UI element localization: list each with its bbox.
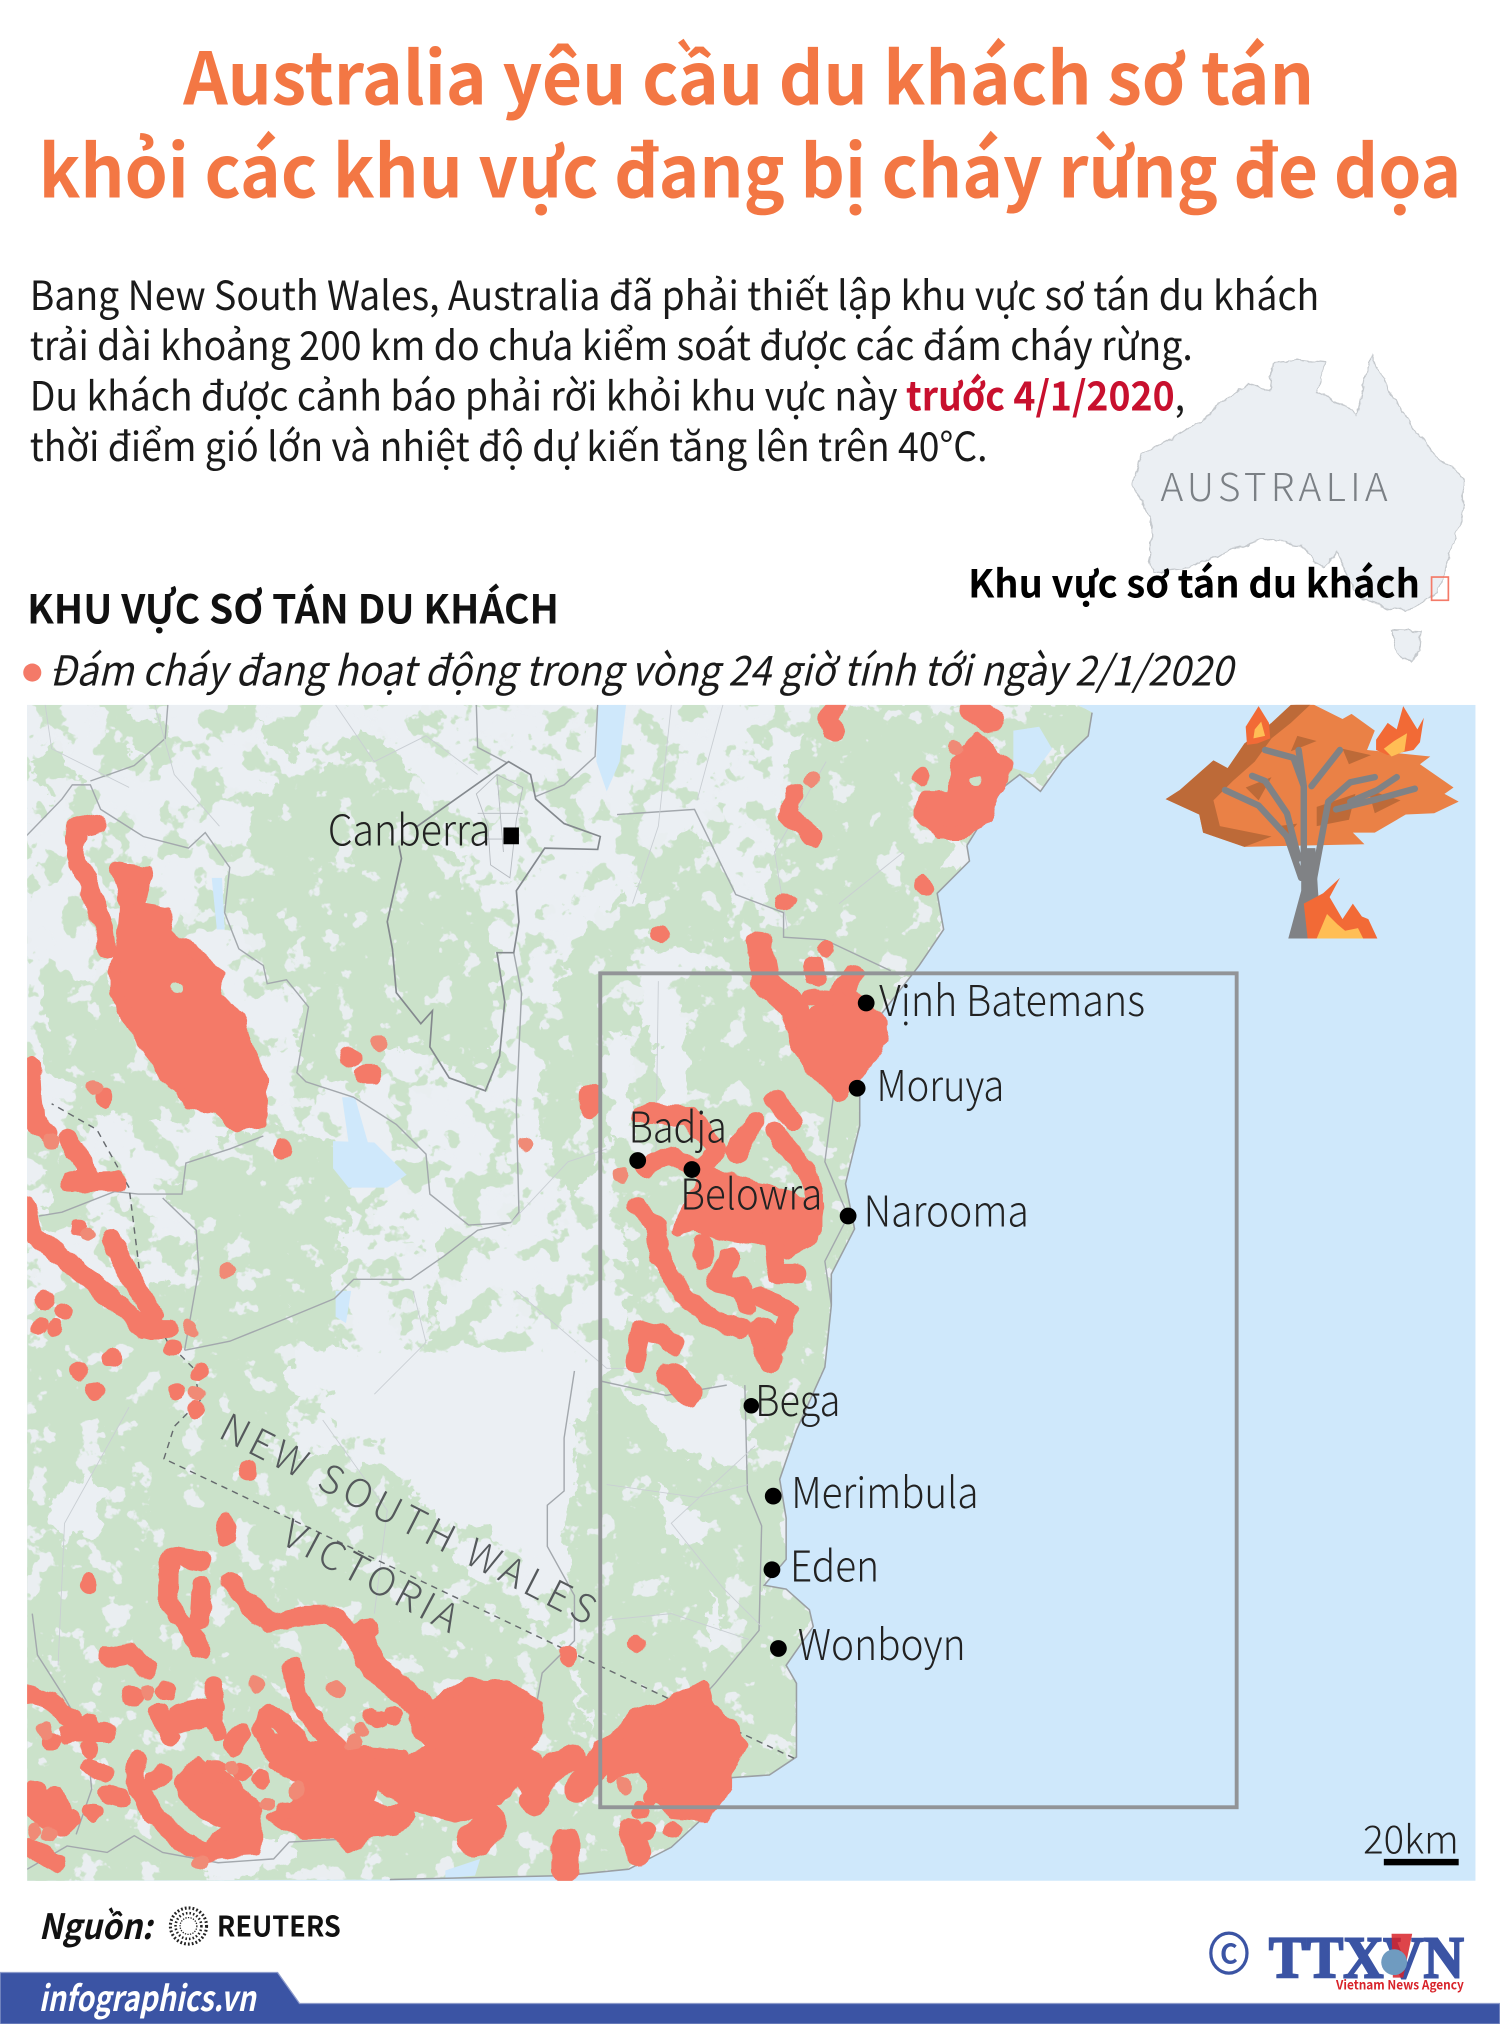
city: Moruya: Moruya [877, 1053, 1004, 1114]
intro paragraph: Bang New South Wales, Australia đã phải thiết lập khu vực sơ tán du khách [30, 264, 1319, 322]
scale bar: 20km [1363, 1810, 1459, 1866]
city: Narooma [840, 1196, 1026, 1227]
source [39, 1900, 341, 1950]
city: Belowra: Belowra [680, 1162, 822, 1223]
title: khỏi các khu vực đang bị cháy rừng đe dọa [39, 114, 1461, 219]
intro paragraph [30, 264, 1319, 473]
city: Merimbula [764, 1474, 976, 1508]
logo: TTXVN: C [1220, 1932, 1238, 1971]
vegetation [13, 704, 1110, 1885]
map: Australia locator [1132, 355, 1464, 664]
city: Wonboyn: Wonboyn [798, 1612, 966, 1673]
map: Australia locator: AUSTRALIA [1160, 457, 1388, 513]
locator label: Khu vực sơ tán du khách [968, 554, 1420, 610]
logo: TTXVN: TTXVN [1269, 1925, 1464, 1991]
title [39, 21, 1461, 219]
state border [52, 1104, 794, 1758]
city: Moruya [848, 1070, 1001, 1111]
city: Eden: Eden [790, 1533, 879, 1594]
city: Eden [764, 1548, 876, 1582]
roads [26, 705, 1092, 1880]
map panel [13, 704, 1475, 1885]
intro paragraph: Du khách được cảnh báo phải rời khỏi khu vực này trước 4/1/2020, [30, 365, 1185, 423]
city: Narooma: Narooma [864, 1178, 1029, 1239]
city: Vịnh Batemans: Vịnh Batemans [879, 968, 1145, 1029]
intro paragraph: trải dài khoảng 200 km do chưa kiểm soát được các đám cháy rừng. [30, 314, 1193, 372]
title: Australia yêu cầu du khách sơ tán [182, 21, 1314, 126]
lakes and rivers [212, 705, 1052, 1878]
city: Canberra: Canberra [328, 798, 491, 859]
source: REUTERS [217, 1904, 341, 1945]
footer bar: infographics.vn [39, 1972, 258, 2022]
city: Wonboyn [770, 1626, 962, 1670]
city: Belowra [684, 1161, 819, 1210]
city: Vịnh Batemans [858, 982, 1144, 1026]
land [27, 705, 1092, 1881]
intro paragraph: thời điểm gió lớn và nhiệt độ dự kiến tăng lên trên 40°C. [30, 415, 988, 473]
city: Bega: Bega [755, 1368, 840, 1429]
logo: TTXVN: Vietnam News Agency [1335, 1974, 1464, 1993]
city: Badja [629, 1108, 724, 1169]
city: Canberra [330, 812, 519, 846]
footer bar [0, 1972, 1500, 2024]
state labels: NEW SOUTH WALES [211, 1398, 607, 1636]
region box [600, 973, 1237, 1807]
fire zones [25, 707, 1008, 1870]
city: Bega [744, 1385, 838, 1427]
city: Merimbula: Merimbula [791, 1460, 978, 1521]
icon: burning tree [1166, 704, 1459, 938]
section heading: KHU VỰC SƠ TÁN DU KHÁCH [27, 578, 559, 636]
city: Badja: Badja [629, 1094, 727, 1155]
legend: Đám cháy đang hoạt động trong vòng 24 giờ tính tới ngày 2/1/2020 [49, 637, 1237, 697]
state labels: VICTORIA [273, 1504, 471, 1644]
source: Nguồn: [39, 1900, 155, 1950]
